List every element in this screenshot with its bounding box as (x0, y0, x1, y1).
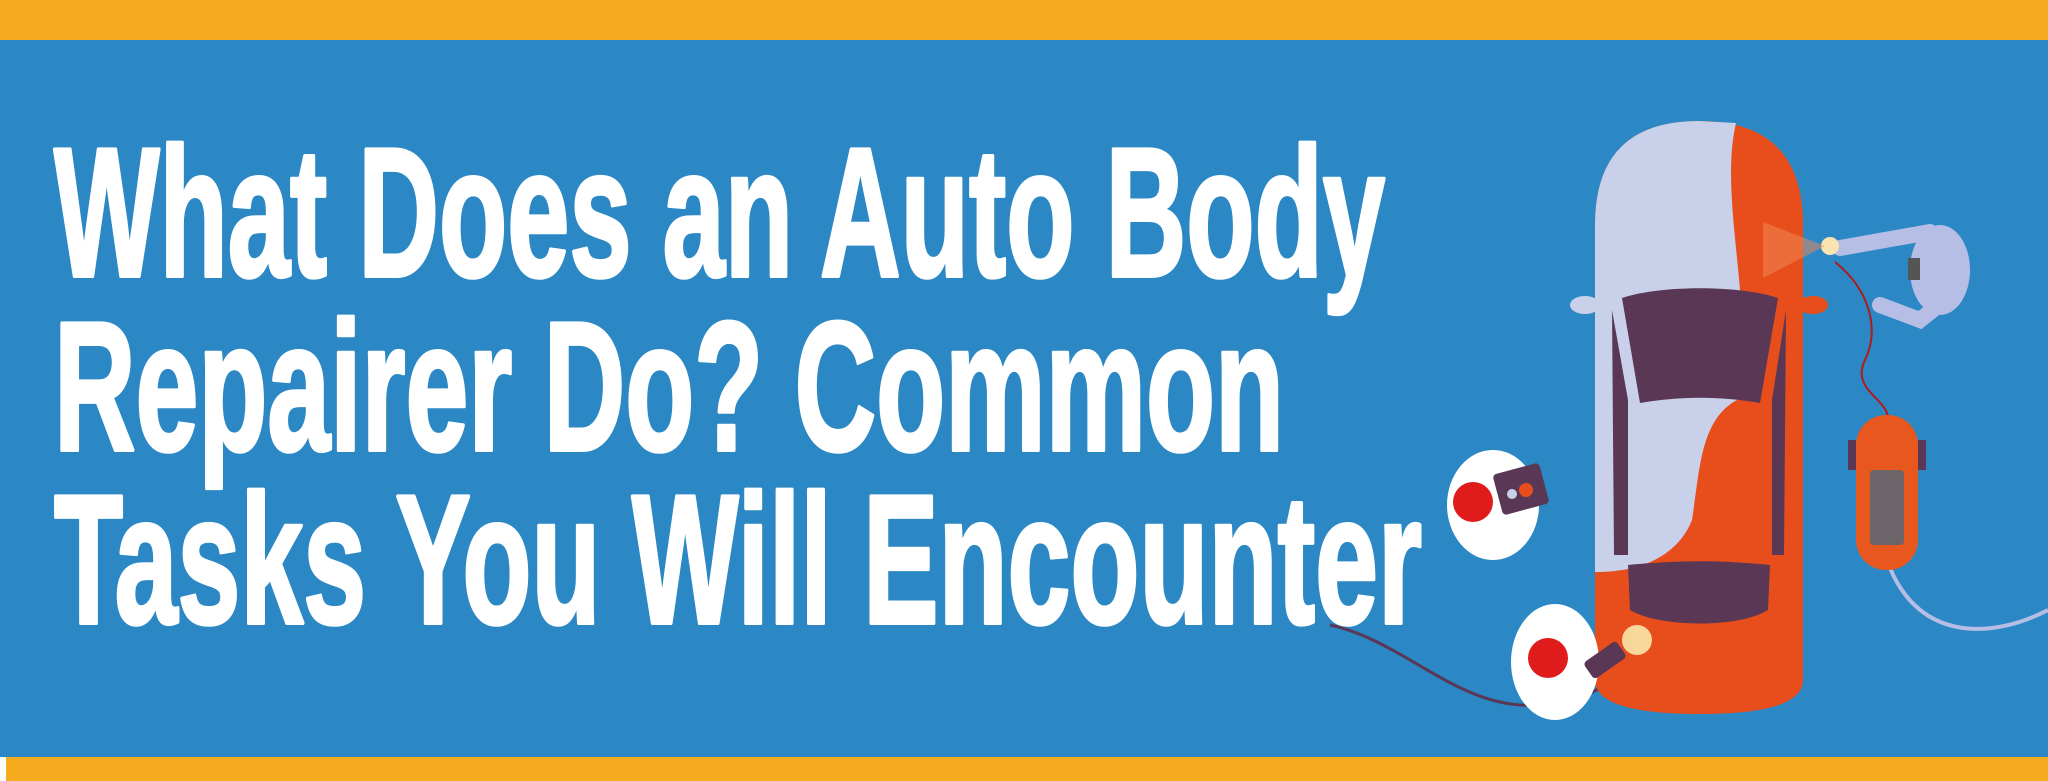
illustration: compressor (1848, 415, 1926, 570)
illustration: car (1570, 121, 1828, 714)
top orange bar (0, 0, 2048, 40)
title (54, 109, 1422, 662)
illustration: worker polishing (1511, 604, 1652, 720)
bottom orange bar (6, 757, 2048, 781)
illustration: painter worker (1763, 222, 1970, 320)
title: Repairer Do? Common (54, 283, 1284, 489)
hose lines (1330, 262, 2048, 705)
illustration: worker with tablet (1447, 450, 1550, 560)
